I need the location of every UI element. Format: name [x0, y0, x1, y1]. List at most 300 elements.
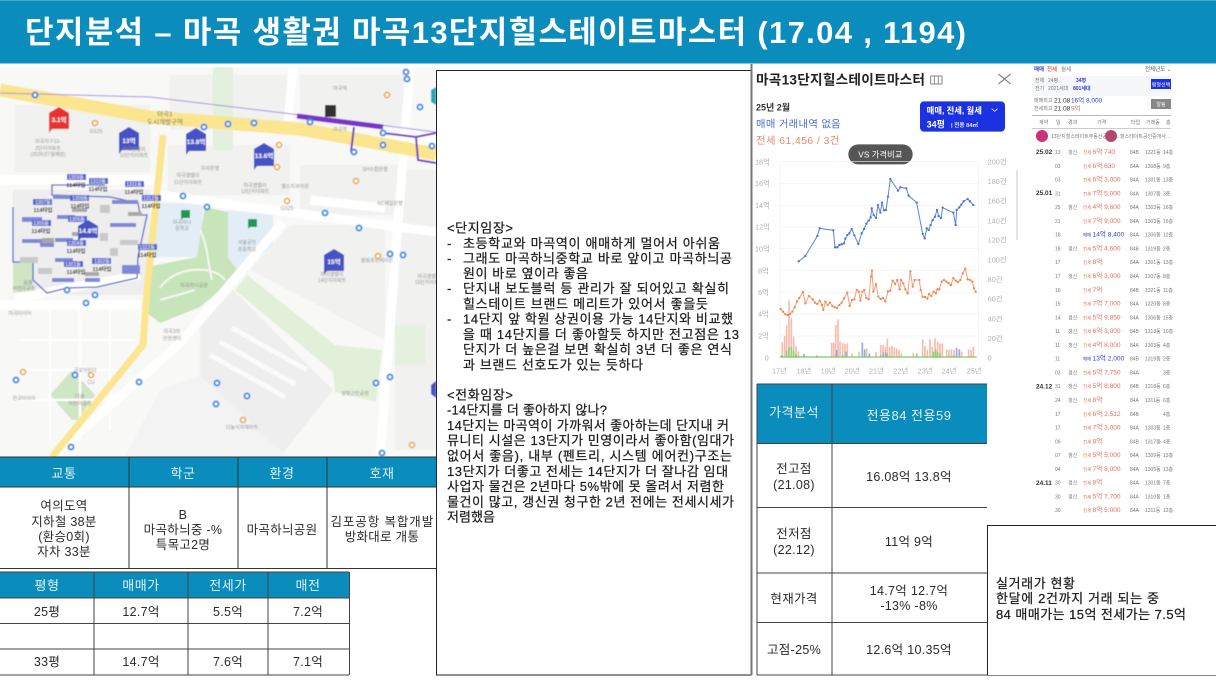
x axis: 24년 — [942, 366, 957, 375]
map place labels: 마곡역 — [333, 126, 347, 133]
icon: price marker 14.8억: 14.8억 — [79, 226, 97, 235]
transaction rows: 84A — [1130, 453, 1140, 459]
parks — [213, 67, 233, 150]
transaction rows: 매매 13억 2,000 — [1083, 355, 1125, 363]
transaction rows: 전세 6억 3,000 — [1083, 176, 1121, 184]
transaction rows: 전세 6억 3,000 — [1083, 272, 1121, 280]
building labels: 114타입 — [66, 181, 86, 189]
map place labels: 마곡엠밸리 — [243, 182, 267, 189]
transaction rows: 전세 7억 7,000 — [1083, 300, 1121, 308]
row: high minus 25%: 12.6억 10.35억 — [866, 643, 952, 657]
transaction rows: 14 — [1055, 315, 1061, 321]
transaction rows: 12층 — [1163, 507, 1174, 514]
map blocks — [15, 75, 436, 450]
list column headers: 거래동 — [1146, 119, 1160, 126]
cell: development — [330, 515, 434, 544]
unit info: 평형선택 — [1152, 82, 1171, 88]
transaction rows: 11 — [1055, 343, 1060, 349]
x axis: 23년 — [918, 366, 933, 375]
transaction rows: 84A — [1130, 426, 1140, 432]
panel: transaction list — [1032, 65, 1174, 514]
cell: transport — [31, 499, 97, 559]
transaction rows: 84A — [1130, 343, 1140, 349]
notes: site visit: 힐스테이트 브랜드 메리트가 있어서 좋을듯 — [463, 296, 708, 312]
building labels: 114타입 — [138, 251, 156, 259]
transaction rows: 1319동 — [1145, 357, 1161, 363]
transaction rows: 15층 — [1163, 314, 1174, 321]
header banner — [0, 0, 1216, 64]
notes: site visit: - — [447, 281, 451, 296]
cell: development: 김포공항 복합개발 — [330, 515, 434, 529]
agency badges: 13단지힐스테이트부동산공인중… — [1051, 133, 1121, 140]
note text: 한달에 2건까지 거래 되는 중 — [996, 591, 1159, 606]
row: current price — [770, 584, 948, 613]
right axis: 20건 — [988, 334, 1003, 343]
building labels: 114타입 — [88, 185, 108, 193]
transaction rows: 전세 7억 — [1083, 286, 1102, 294]
map place labels: 금호어린이 — [73, 367, 97, 374]
map place labels: 15단지아파트 — [415, 279, 444, 286]
notes: phone survey: 13단지가 더좋고 전세는 14단지가 더 잘나감 임대 — [447, 464, 728, 479]
transaction rows: 전세 4억 8,000 — [1083, 341, 1121, 349]
building labels: 114타입 — [142, 202, 160, 210]
table: prices by size — [0, 572, 350, 675]
transaction rows: 전세 6억 2,512 — [1083, 410, 1121, 418]
notes: site visit: 그래도 마곡하늬중학교 바로 앞이고 마곡하늬공 — [463, 251, 732, 266]
month summary: 25년 2월 — [756, 102, 790, 113]
transaction rows: 24.11 — [1036, 480, 1052, 487]
table headers: 교통 — [52, 466, 76, 481]
transaction rows: 전세 7억 3,000 — [1083, 424, 1121, 432]
transaction rows: 전세 5억 9,850 — [1083, 313, 1121, 321]
subway lines — [0, 93, 436, 132]
map place labels: 어린이공원 — [68, 400, 92, 407]
row: all-time high — [773, 462, 952, 492]
right axis: 100건 — [988, 255, 1007, 264]
right axis: 0 — [988, 353, 992, 362]
icon: price marker 13억: 13억 — [122, 136, 136, 145]
building labels: 114타입 — [66, 247, 86, 255]
map place labels: 달빛근린공원 — [341, 390, 369, 397]
transaction rows: 13층 — [1163, 452, 1174, 459]
notes: site visit: 을 때 14단지를 더 좋아할듯 하지만 전고점은 13 — [463, 327, 739, 342]
map place labels: 10단지아파트 — [120, 152, 149, 159]
transaction rows: 1318동 — [1145, 384, 1161, 390]
notes: site visit: 단지가 더 높은걸 보면 확실히 3년 더 좋은 연식 — [463, 342, 732, 357]
cell: transport: 지하철 38분 — [31, 515, 97, 529]
unit info: 34평 — [1076, 77, 1087, 84]
note text: 84 매매가는 15억 전세가는 7.5억 — [996, 607, 1186, 622]
building labels: 1301동 — [65, 262, 81, 268]
map place labels: 안전센터 — [163, 335, 181, 342]
transaction rows: 1306동 — [1145, 233, 1161, 239]
map place labels: 마곡엠밸리 — [176, 172, 200, 179]
transaction rows: 1301동 — [1145, 260, 1161, 266]
tabs — [1034, 65, 1171, 73]
left axis: 0 — [765, 353, 769, 362]
map place labels: 11단지아파트 — [174, 179, 202, 186]
transaction rows: 1층 — [1163, 424, 1171, 432]
x axis: 21년 — [869, 366, 884, 375]
notes: site visit: - — [447, 236, 451, 251]
transaction rows: 1321동 — [1145, 150, 1161, 156]
left axis: 2억 — [758, 332, 769, 341]
compare pill: VS 가격비교 — [858, 149, 903, 159]
transaction rows: 전세 5억 7,750 — [1083, 368, 1121, 376]
icon: price marker 13.6억: 13.6억 — [255, 151, 273, 160]
left axis: 6억 — [758, 288, 769, 297]
row: current price: -13% -8% — [880, 599, 938, 613]
transaction rows: 전세 6억 740 — [1083, 148, 1115, 156]
notes: site visit: 과 브랜드 선호도가 있는 듯하다 — [463, 358, 643, 372]
transaction rows: 갱신 — [1068, 397, 1078, 404]
panel: actual transaction note — [987, 526, 1216, 676]
left axis: 18억 — [755, 157, 770, 166]
cell: transport: 여의도역 — [40, 499, 88, 513]
transaction rows: 03 — [1055, 178, 1061, 184]
left axis: 4억 — [758, 310, 769, 319]
left axis: 14억 — [755, 201, 770, 210]
title: 단지분석 – 마곡 생활권 마곡13단지힐스테이트마스터 (17.04 , 1194) — [25, 15, 966, 50]
transaction rows: 84A — [1130, 164, 1140, 170]
cell: development: 방화대로 개통 — [345, 530, 419, 544]
jeonse price line — [781, 269, 976, 315]
transaction rows: 13층 — [1163, 259, 1174, 266]
right axis: 40건 — [988, 314, 1003, 323]
row: low: 11억 9억 — [885, 535, 933, 549]
transaction rows: 12층 — [1163, 232, 1174, 239]
x axis: 25년 — [967, 366, 982, 375]
transaction rows: 갱신 — [1068, 342, 1078, 349]
transaction rows: 84A — [1130, 219, 1140, 225]
transaction rows: 11 — [1055, 357, 1060, 363]
map place labels: 어린이공원 — [12, 285, 36, 292]
transaction rows: 1321동 — [1145, 288, 1161, 294]
tabs: 매매 — [1034, 65, 1044, 73]
transaction rows: 07 — [1055, 453, 1061, 459]
right axis: 60건 — [988, 295, 1003, 304]
transaction rows: 13층 — [1163, 177, 1174, 184]
x axis: 19년 — [821, 366, 836, 375]
transaction rows: 84A — [1130, 467, 1140, 473]
transaction rows: 84A — [1130, 508, 1140, 514]
analysis headers: 전용84 전용59 — [867, 408, 951, 423]
row: high minus 25% — [767, 643, 952, 657]
unit info: 24평 — [1048, 77, 1058, 84]
filter button: 34평 — [927, 120, 945, 130]
transaction rows: 갱신 — [1068, 452, 1078, 459]
row: all-time high: (21.08) — [773, 478, 815, 492]
agency badges: 힐스테이트공인중개사… — [1120, 133, 1171, 140]
transaction rows: 14층 — [1163, 149, 1174, 156]
map place labels: 도시개발구역 — [147, 117, 183, 126]
apartment buildings — [22, 195, 140, 282]
x axis: 17년 — [772, 366, 787, 375]
unit info: 전기 — [1035, 85, 1044, 92]
unit info: 전체 — [1035, 77, 1045, 84]
map place labels: 마곡1 — [157, 109, 173, 118]
transaction rows: 25.01 — [1036, 190, 1053, 197]
notes: phone survey: 저렴했음 — [447, 510, 495, 524]
sale price line — [799, 179, 973, 261]
panel: field notes — [436, 70, 751, 675]
building labels: 1302동 — [94, 259, 110, 265]
size table headers: 평형 — [35, 578, 59, 593]
transaction rows: 3층 — [1163, 369, 1171, 376]
transaction rows: 갱신 — [1068, 480, 1078, 487]
chart grid — [780, 162, 978, 358]
transaction rows: 1309동 — [1145, 453, 1161, 459]
transaction rows — [1036, 148, 1174, 514]
row: low: (22.12) — [773, 543, 815, 557]
transaction rows: 11층 — [1163, 287, 1173, 294]
right axis: 140건 — [988, 216, 1007, 225]
record highs: 21.08 — [1054, 98, 1071, 104]
transaction rows: 03 — [1055, 370, 1061, 376]
map place labels: 12단지아파트 — [241, 188, 270, 195]
transaction rows: 갱신 — [1068, 149, 1078, 156]
icon: price marker 13.8억 — [186, 128, 206, 155]
right axis: 80건 — [988, 275, 1003, 284]
transaction rows: 84A — [1130, 205, 1140, 211]
map place labels: 올림포연세의원 — [361, 257, 393, 264]
transaction rows: 24 — [1055, 398, 1061, 404]
size table headers: 매전 — [296, 578, 320, 593]
transaction rows: 갱신 — [1068, 383, 1078, 390]
map place labels: 마곡엠밸리 — [320, 271, 344, 278]
transaction rows: 18 — [1055, 233, 1061, 239]
notes: site visit: - — [447, 312, 451, 326]
tabs: 전체년도 ⌄ — [1145, 65, 1171, 73]
icon: map book — [931, 76, 942, 84]
left axis: 16억 — [755, 179, 770, 188]
map place labels: 중학교 — [175, 225, 189, 232]
left axis: 12억 — [755, 223, 770, 232]
x axis: 20년 — [845, 366, 860, 375]
building labels: 1309동 — [68, 175, 84, 181]
transaction rows: 1303동 — [1145, 205, 1161, 211]
right axis: 160건 — [988, 197, 1007, 206]
transaction rows: 24.12 — [1036, 384, 1053, 390]
transaction rows: 84B — [1130, 288, 1140, 294]
transaction rows: 1308동 — [1145, 164, 1161, 170]
map place labels: 마곡역 — [333, 85, 347, 92]
transaction rows: 11 — [1055, 329, 1060, 335]
transaction rows: 전세 8억 — [1083, 437, 1102, 445]
transaction rows: 6층 — [1163, 397, 1171, 404]
transaction rows: 30 — [1055, 508, 1061, 514]
transit and place dots — [14, 70, 434, 456]
list column headers: 일 — [1056, 119, 1061, 126]
map place labels: 2단지아파트 — [35, 145, 61, 152]
transaction rows: 84B — [1130, 150, 1140, 156]
transaction rows: 2층 — [1163, 245, 1171, 252]
row 25평: 7.2억 — [293, 605, 323, 619]
transaction rows: 84A — [1130, 274, 1140, 280]
right axis: 200건 — [988, 157, 1007, 166]
transaction rows: 84A — [1130, 481, 1140, 487]
row: all-time high: 전고점 — [776, 462, 812, 476]
row 33평: 14.7억 — [122, 655, 160, 669]
notes: site visit: - — [447, 251, 451, 266]
notes: phone survey: 14단지는 마곡역이 가까워서 좋아하는데 단지내 커 — [447, 418, 729, 433]
month summary: 전세 61,456 / 3건 — [756, 135, 839, 147]
transaction rows: 25 — [1055, 205, 1061, 211]
transaction rows: 84B — [1130, 384, 1140, 390]
transaction rows: 전세 8억 — [1083, 396, 1102, 404]
record highs: 21.08 — [1054, 106, 1071, 112]
unit info — [1032, 76, 1171, 96]
map place labels: 초등학교 — [238, 246, 257, 253]
transaction rows: 1311동 — [1145, 508, 1161, 514]
schools — [153, 203, 273, 270]
record highs: 16억 8,000 — [1071, 96, 1103, 104]
row 33평: 33평 — [34, 655, 60, 669]
tabs: 전세 — [1047, 65, 1057, 73]
table: price analysis — [757, 384, 987, 675]
transaction rows: 3층 — [1163, 190, 1171, 197]
building labels: 1306동 — [69, 217, 85, 223]
transaction rows: 전세 5억 4,600 — [1083, 244, 1121, 252]
transaction rows: 4층 — [1163, 411, 1171, 418]
transaction rows: 전세 7억 9,000 — [1083, 217, 1121, 225]
transaction rows: 84B — [1130, 439, 1140, 445]
transaction rows: 1303동 — [1145, 219, 1161, 225]
notes: site visit: 초등학교와 마곡역이 애매하게 멀어서 아쉬움 — [463, 236, 720, 251]
notes: phone survey: -14단지를 더 좋아하지 않나? — [447, 402, 607, 418]
table headers: 호재 — [370, 466, 394, 481]
list column headers: 가격 — [1097, 119, 1106, 126]
note text — [996, 576, 1186, 622]
map place labels: 마곡엠밸리 — [417, 273, 441, 280]
transaction rows: 1313동 — [1145, 329, 1161, 335]
transaction rows: 전세 7억 5,000 — [1083, 189, 1121, 197]
notes: site visit: 단지내 보도블럭 등 관리가 잘 되어있고 확실히 — [463, 281, 729, 296]
list column headers: 계약 — [1039, 119, 1049, 126]
building labels: 114타입 — [66, 268, 86, 276]
building labels: 1311동 — [126, 182, 142, 188]
filter button: | 전용 84㎡ — [951, 121, 978, 129]
yellow roads — [0, 90, 436, 154]
transaction rows: 전세 5억 5,000 — [1083, 451, 1121, 459]
row 25평 — [34, 605, 323, 619]
table headers: 학군 — [171, 466, 195, 481]
transaction rows: 10층 — [1163, 328, 1174, 335]
building labels: 1308동 — [72, 196, 88, 202]
cell: school: 마곡하늬중 -% — [144, 523, 222, 537]
map place labels: 서울공진 — [238, 239, 257, 246]
building labels: 114타입 — [70, 202, 90, 210]
transaction rows: 04 — [1055, 467, 1061, 473]
icon: price marker red — [49, 107, 69, 133]
filter button: 매매, 전세, 월세 — [927, 106, 982, 116]
transaction rows: 13 — [1055, 150, 1061, 156]
transaction rows: 84B — [1130, 246, 1140, 252]
row 33평: 7.6억 — [213, 655, 243, 669]
row: high minus 25%: 고점-25% — [767, 643, 821, 657]
transaction rows: 84A — [1130, 260, 1140, 266]
transaction rows: 84A — [1130, 398, 1140, 404]
transaction rows: 1307동 — [1145, 191, 1161, 197]
building labels: 114타입 — [124, 188, 144, 196]
row: all-time high: 16.08억 13.8억 — [866, 470, 952, 484]
map place labels: 다농식자재마트 — [226, 424, 258, 431]
transaction rows: 4층 — [1163, 438, 1171, 445]
panel: price trend chart — [755, 71, 1011, 375]
building labels — [32, 174, 161, 276]
record highs — [1034, 96, 1171, 112]
map place labels: CU — [87, 380, 95, 386]
cell: environment: 마곡하늬공원 — [247, 523, 317, 537]
map place labels: SC제일은행 — [377, 200, 403, 207]
transaction rows: 1층 — [1163, 493, 1171, 500]
map place labels: 14단지아파트 — [318, 277, 347, 284]
icon: price marker 15억: 15억 — [327, 257, 341, 266]
notes: site visit: 14단지 앞 학원 상권이용 가능 14단지와 비교했 — [463, 312, 733, 326]
transaction rows: 84A — [1130, 370, 1140, 376]
map place labels: 한국타이어 — [12, 395, 36, 402]
notes: site visit: <단지임장> — [447, 220, 513, 236]
transaction rows: 16 — [1055, 288, 1061, 294]
map place labels: 마곡하늬 — [173, 219, 191, 226]
shop dots — [20, 92, 414, 448]
notes: site visit: 원이 바로 옆이라 좋음 — [463, 266, 588, 281]
notes: site visit — [447, 220, 739, 372]
analysis headers — [769, 405, 951, 423]
transaction rows: 84B — [1130, 412, 1140, 418]
transaction rows: 18 — [1055, 246, 1061, 252]
building labels: 114타입 — [34, 206, 52, 214]
panel: location map — [0, 67, 444, 457]
transaction rows: 2층 — [1163, 356, 1171, 363]
note text: 실거래가 현황 — [996, 576, 1075, 591]
transaction rows: 16층 — [1163, 204, 1174, 211]
row 25평: 12.7억 — [122, 605, 160, 619]
transaction rows: 전세 6억 630 — [1083, 162, 1115, 170]
volume bars — [780, 301, 977, 358]
unit info: 2021세대 — [1048, 85, 1069, 92]
transaction rows: 전세 8억 — [1083, 479, 1102, 487]
map place labels: 마곡타이어 — [8, 310, 32, 317]
notes: phone survey: 물건이 많고, 갱신권 청구한 2년 전에는 전세시세가 — [447, 494, 734, 510]
list column headers: 타입 — [1131, 119, 1140, 126]
transaction rows: 17 — [1055, 260, 1061, 266]
transaction rows: 갱신 — [1068, 204, 1078, 211]
agency badges — [1036, 130, 1171, 142]
transaction rows: 1310동 — [1145, 494, 1161, 500]
notes: phone survey: 없어서 좋음), 내부 (펜트리, 시스템 에어컨)구조는 — [447, 448, 732, 464]
transaction rows: 1301동 — [1145, 178, 1161, 184]
map place labels: 마곡지구10- — [35, 138, 61, 145]
transaction rows: 8층 — [1163, 300, 1171, 308]
transaction rows: 전세 6억 3,000 — [1083, 327, 1121, 335]
icon: price marker 14.8억 — [78, 220, 98, 242]
transaction rows: 갱신 — [1068, 245, 1078, 252]
transaction rows: 1307동 — [1145, 274, 1161, 280]
transaction rows: 1320동 — [1145, 302, 1161, 308]
left axis: 8억 — [758, 266, 769, 275]
analysis headers: 가격분석 — [769, 405, 819, 420]
cell: transport: 자차 33분 — [37, 545, 91, 559]
building labels: 1322동 — [139, 245, 155, 251]
map place labels: (2026년7월예정) — [30, 151, 66, 158]
tabs: 월세 — [1061, 65, 1071, 73]
row: low: 전저점 — [776, 527, 812, 541]
record highs: 9억 — [1071, 104, 1081, 112]
transaction rows: 갱신 — [1068, 328, 1078, 335]
map place labels: GS25 — [281, 206, 294, 212]
cell: school: B — [179, 508, 187, 522]
